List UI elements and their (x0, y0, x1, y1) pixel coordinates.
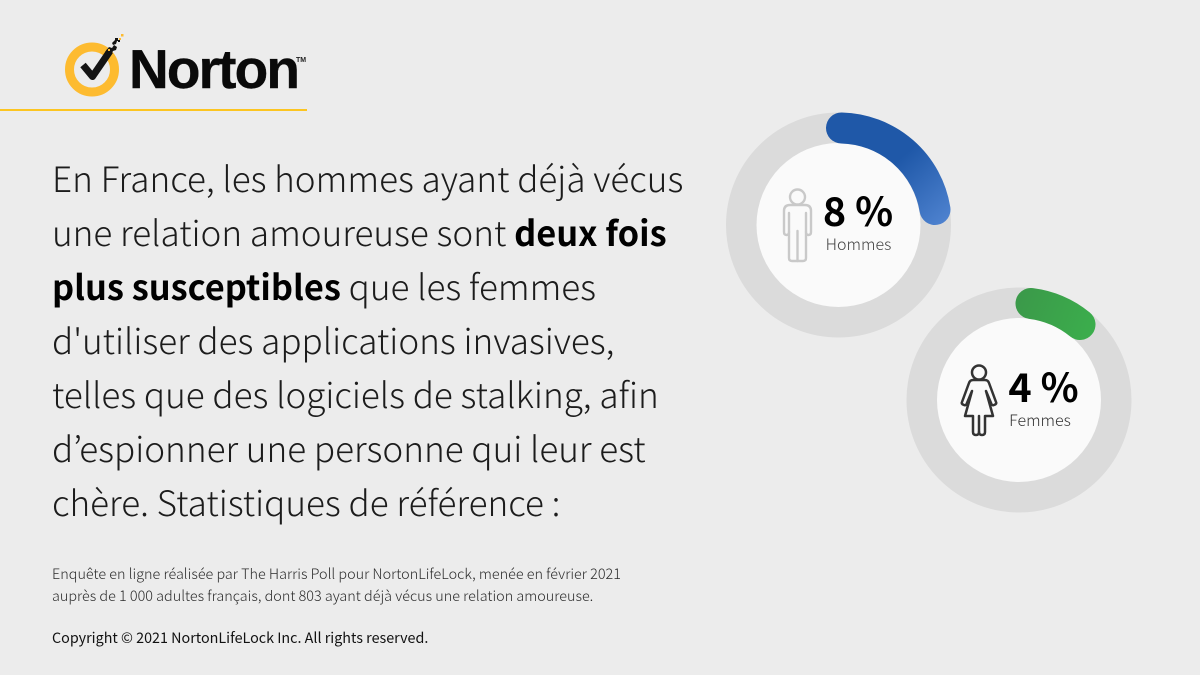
source note (52, 563, 621, 606)
main text block: telles que des logiciels de stalking, afin (52, 368, 659, 419)
trademark: TM (296, 57, 306, 64)
logo: Norton (65, 34, 306, 100)
label: Hommes (826, 231, 891, 255)
main text block: En France, les hommes ayant déjà vécus (52, 152, 683, 203)
main text block: une relation amoureuse sont deux fois (52, 206, 667, 257)
donut: men 8 % (742, 128, 936, 322)
value: 4 % (1008, 357, 1079, 414)
source note: Enquête en ligne réalisée par The Harris Poll pour NortonLifeLock, menée en février 2021 (52, 563, 621, 584)
main text block: d'utiliser des applications invasives, (52, 314, 614, 365)
main text block: d’espionner une personne qui leur est (52, 422, 646, 473)
main text block (52, 152, 683, 527)
icon: yellow ring with check mark (70, 34, 124, 92)
main text block: chère. Statistiques de référence : (52, 476, 560, 527)
icon: man (784, 190, 811, 261)
label: Femmes (1009, 407, 1071, 431)
main text block: plus susceptibles que les femmes (52, 260, 596, 311)
icon: woman (962, 366, 996, 435)
copyright: Copyright © 2021 NortonLifeLock Inc. All rights reserved. (52, 627, 428, 648)
value: 8 % (823, 181, 893, 238)
donut: women 4 % (922, 303, 1116, 497)
source note: auprès de 1 000 adultes français, dont 803 ayant déjà vécus une relation amoureuse. (52, 585, 593, 606)
yellow divider under logo (0, 109, 307, 111)
wordmark: Norton (129, 38, 298, 100)
